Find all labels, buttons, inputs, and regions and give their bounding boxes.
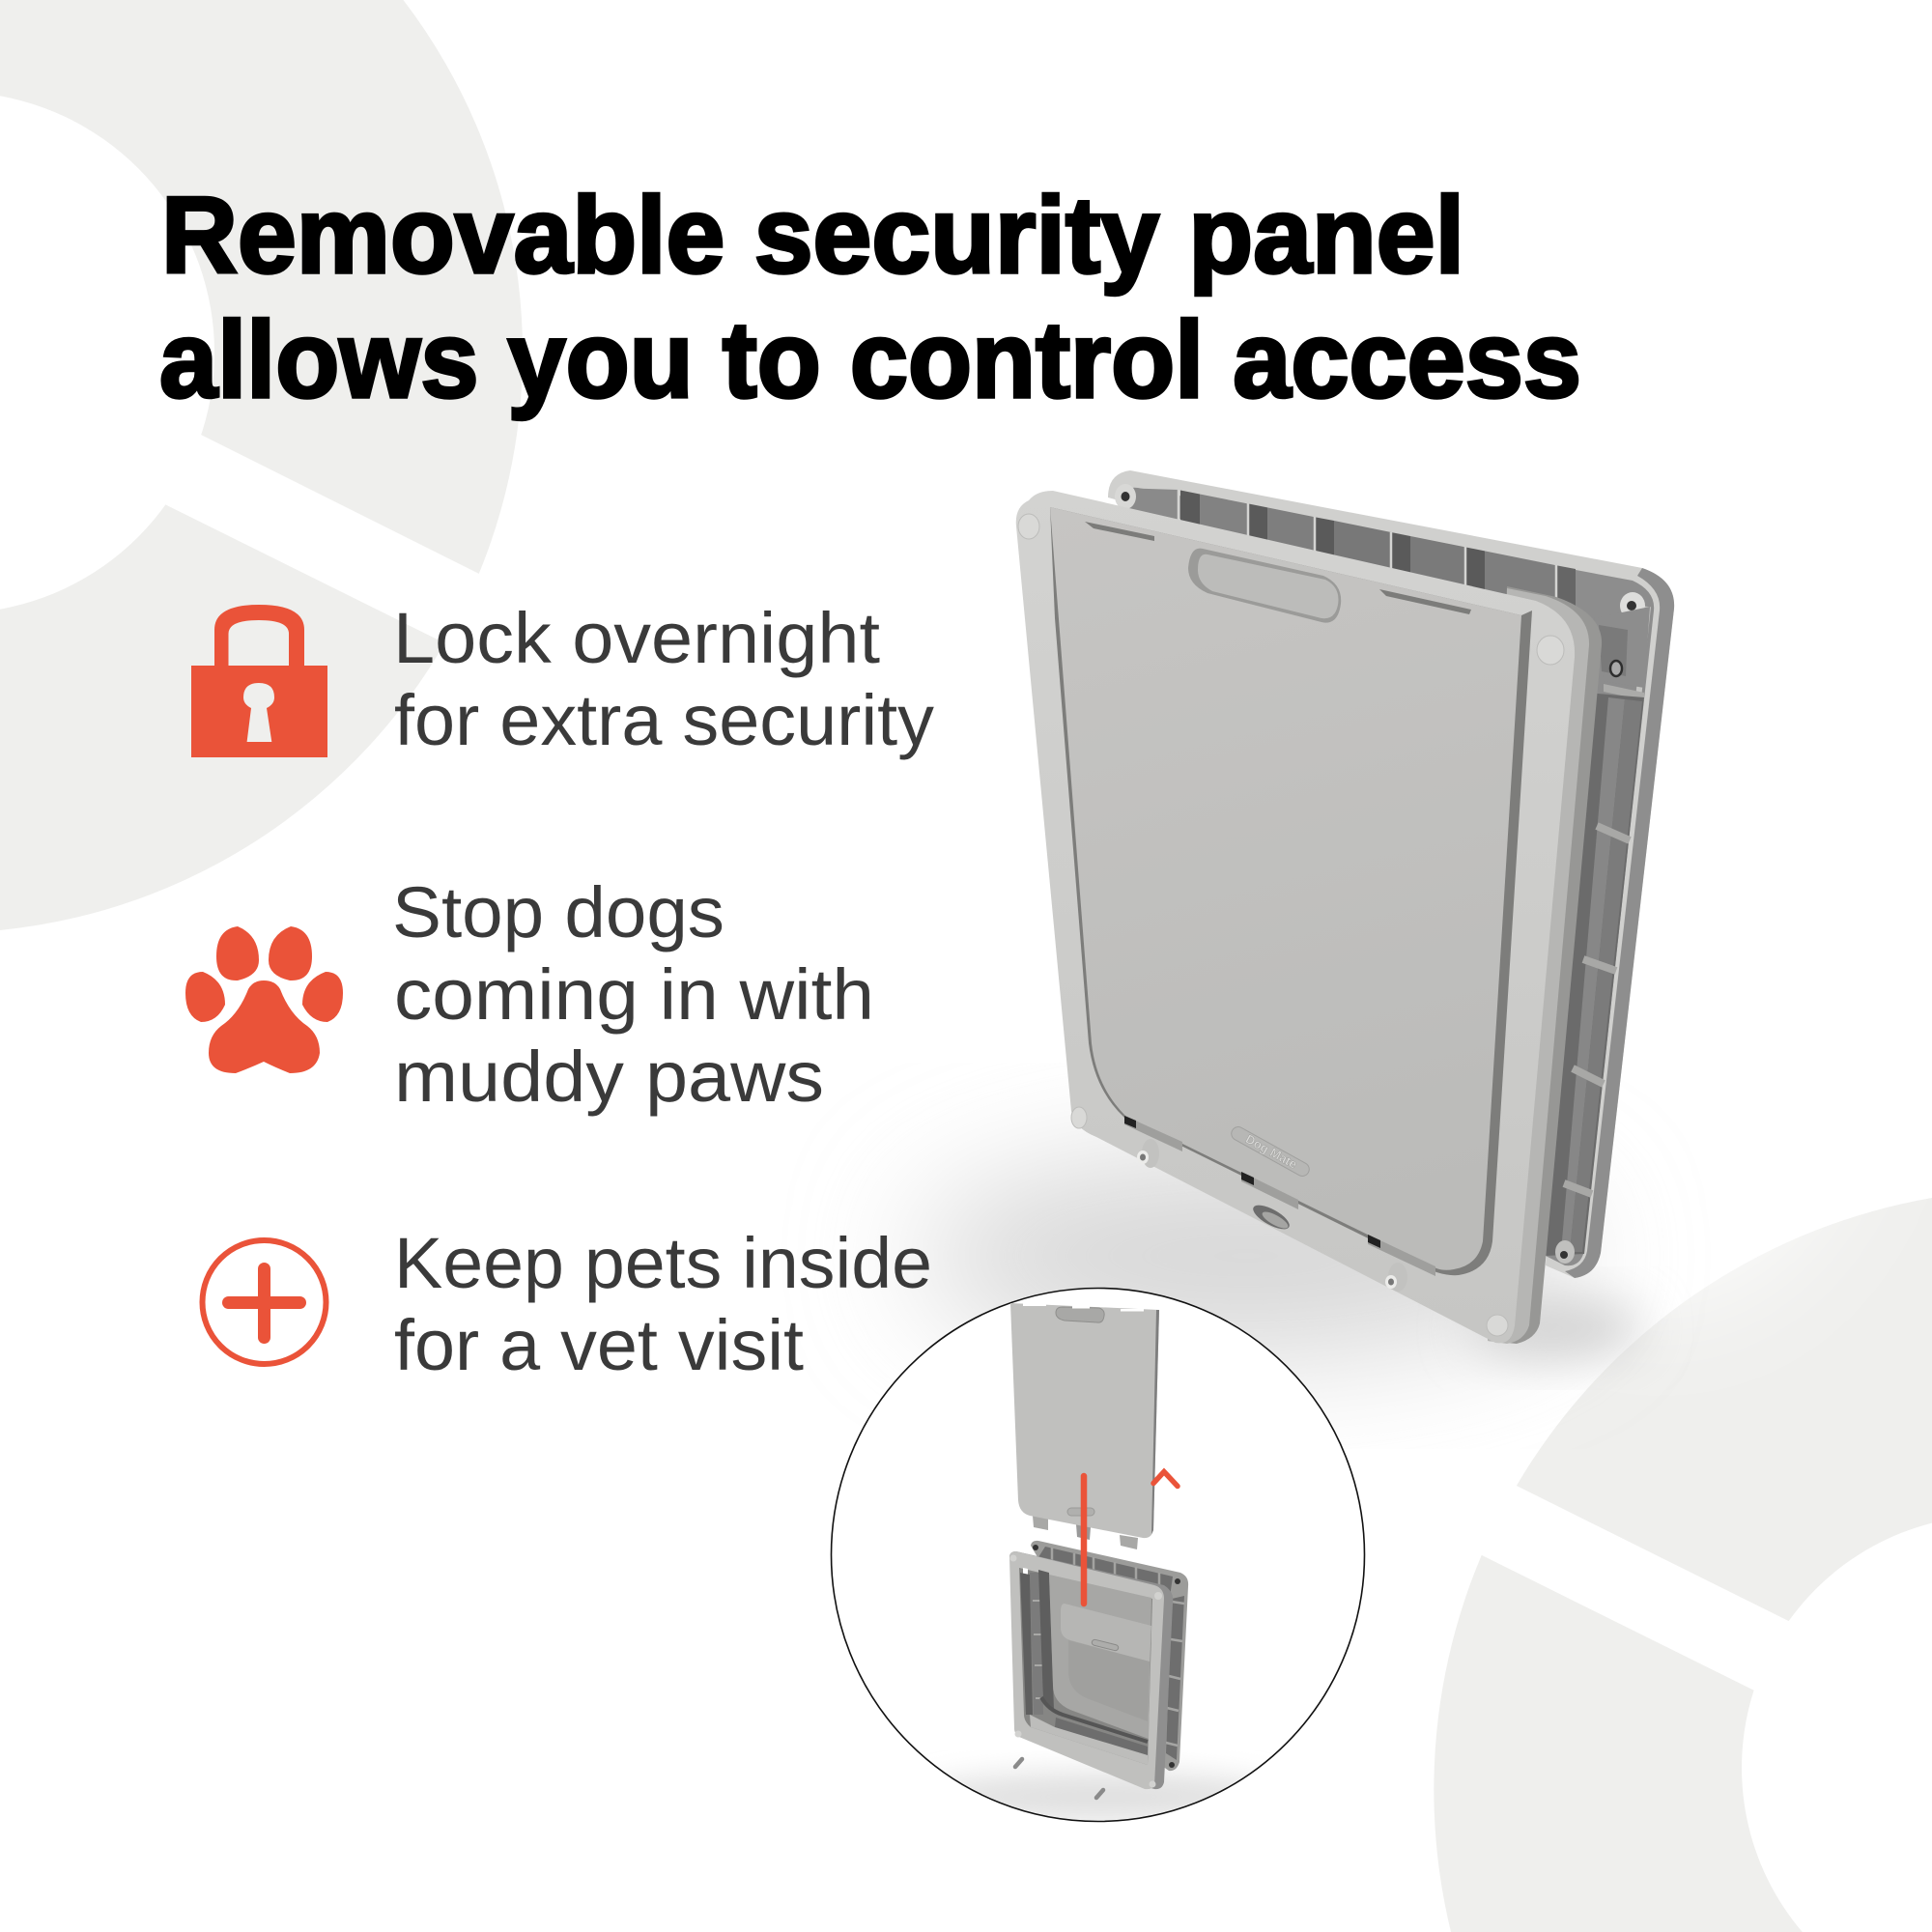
feature: lock overnight [191, 598, 934, 760]
inset floor shadow [918, 1774, 1285, 1820]
text: lock overnight: for extra security [394, 680, 934, 760]
text: muddy paws [392, 872, 874, 1117]
text: muddy paws: muddy paws [394, 1037, 824, 1117]
removable security panel [1050, 507, 1521, 1270]
feature: vet visit [203, 1223, 932, 1385]
arrow shaft [1081, 1476, 1087, 1604]
product: pet door with security panel [1016, 470, 1674, 1344]
title [159, 175, 1581, 420]
background ring: bottom right [1434, 1198, 1932, 1932]
background ring: top left [0, 0, 523, 930]
screws [1015, 1759, 1103, 1798]
brand plate: Dog Mate [1229, 1123, 1312, 1179]
handle [1188, 549, 1341, 623]
text: vet visit: for a vet visit [394, 1305, 804, 1385]
icon: paw print [185, 926, 343, 1073]
background ring gap: bottom right [1352, 1405, 1884, 1754]
text: lock overnight [393, 598, 934, 760]
text: lock overnight: Lock overnight [393, 598, 880, 678]
front frame [1016, 491, 1602, 1344]
title: allows you to control access [159, 299, 1581, 420]
arrowhead [1153, 1472, 1178, 1486]
icon: medical cross [203, 1240, 327, 1364]
text: vet visit [394, 1223, 932, 1385]
side channel [1546, 607, 1650, 1264]
back frame [1108, 470, 1674, 1278]
title: Removable security panel [161, 175, 1464, 296]
inset lower frame [1009, 1541, 1188, 1798]
top ribs and cells [1119, 488, 1576, 618]
icon: padlock [191, 605, 327, 757]
groove around panel [1050, 507, 1532, 1275]
inset lifted panel [1010, 1303, 1159, 1549]
background ring gap: top left [97, 383, 580, 710]
top slots [1085, 522, 1471, 614]
text: muddy paws: coming in with [394, 954, 874, 1035]
feature: muddy paws [185, 872, 874, 1117]
floor shadow behind product [918, 753, 1855, 1359]
lower slots and pegs [1124, 1116, 1435, 1292]
corner screw posts [1115, 484, 1645, 619]
corner bumps [1018, 514, 1564, 1336]
text: vet visit: Keep pets inside [394, 1223, 932, 1303]
brand plate: Dog Mate: Dog Mate [1243, 1131, 1299, 1172]
text: muddy paws: Stop dogs [392, 872, 724, 952]
inset circle: removing the panel [831, 1289, 1364, 1822]
